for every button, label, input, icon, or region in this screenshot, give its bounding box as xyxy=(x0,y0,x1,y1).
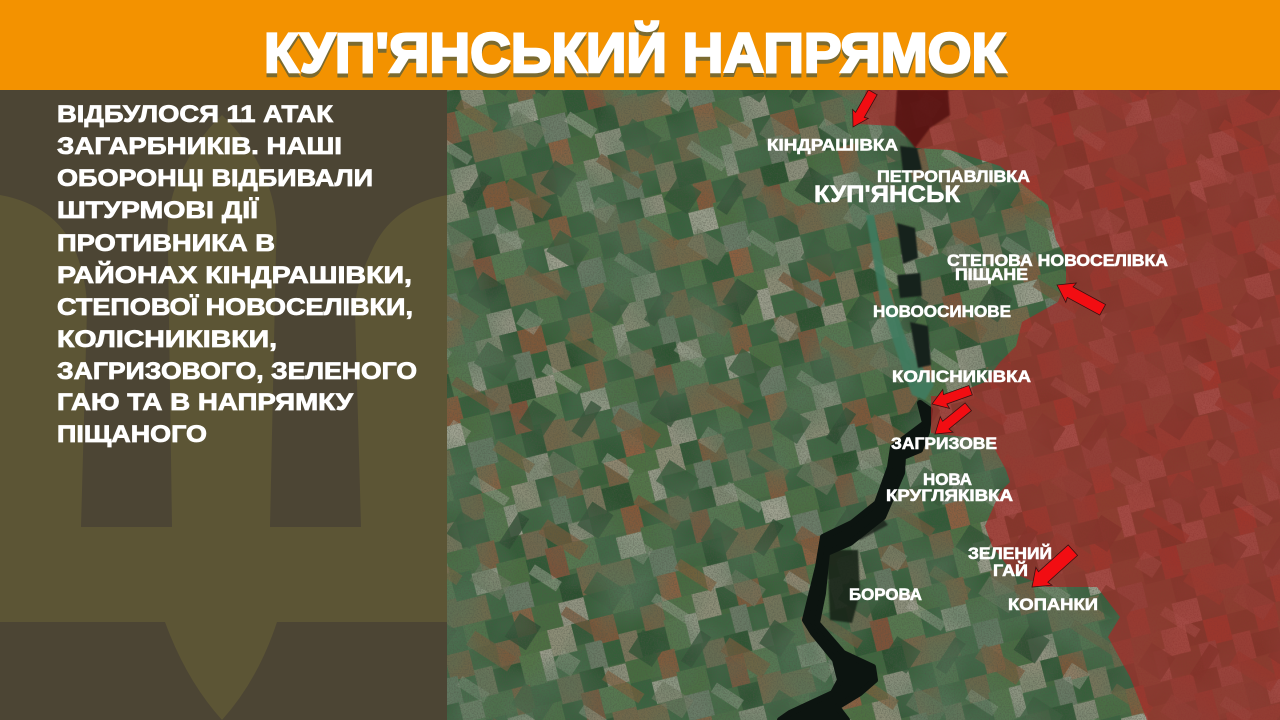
arrow: Kolisnykivka xyxy=(931,385,973,409)
arrow: Kindrashivka xyxy=(852,90,878,128)
body text: ПРОТИВНИКА В xyxy=(57,230,275,257)
label: Nova: НОВА xyxy=(923,471,972,489)
label: Hai: ГАЙ xyxy=(993,561,1028,580)
occupied territory overlay xyxy=(858,90,1280,720)
label: Kolisnykivka: КОЛІСНИКІВКА xyxy=(892,368,1031,386)
label: Zahryzove: ЗАГРИЗОВЕ xyxy=(891,435,997,453)
body text: ВІДБУЛОСЯ 11 АТАК xyxy=(57,101,333,128)
body text: КОЛІСНИКІВКИ, xyxy=(57,326,277,353)
river xyxy=(780,403,930,720)
body text: СТЕПОВОЇ НОВОСЕЛІВКИ, xyxy=(57,294,413,321)
left panel xyxy=(0,90,447,720)
map labels xyxy=(767,136,1168,614)
label: Kruhliakivka: КРУГЛЯКІВКА xyxy=(886,487,1013,505)
dark forest in occupied zone xyxy=(895,90,950,148)
body text: РАЙОНАХ КІНДРАШІВКИ, xyxy=(57,261,412,289)
body text: ОБОРОНЦІ ВІДБИВАЛИ xyxy=(57,165,373,192)
green river valley xyxy=(866,215,934,400)
title: КУП'ЯНСЬКИЙ НАПРЯМОК xyxy=(264,21,1007,84)
arrow: Zahryzove xyxy=(934,402,972,434)
label: Borova: БОРОВА xyxy=(849,586,922,604)
label: Zelenyi: ЗЕЛЕНИЙ xyxy=(968,544,1052,563)
body text: ГАЮ ТА В НАПРЯМКУ xyxy=(57,389,354,416)
body text: ЗАГАРБНИКІВ. НАШІ xyxy=(57,133,342,160)
arrow: Zelenyi Hai xyxy=(1032,544,1078,588)
title bar xyxy=(0,0,1280,90)
label: Stepova Novoselivka: СТЕПОВА НОВОСЕЛІВКА xyxy=(947,252,1168,270)
body text: ПІЩАНОГО xyxy=(57,421,207,448)
body text: ЗАГРИЗОВОГО, ЗЕЛЕНОГО xyxy=(57,358,417,385)
body text: ШТУРМОВІ ДІЇ xyxy=(57,197,260,224)
panel: map xyxy=(447,88,1280,720)
forest patches xyxy=(827,146,931,623)
label: Petropavlivka: ПЕТРОПАВЛІВКА xyxy=(877,168,1030,186)
label: Novoosynove: НОВООСИНОВЕ xyxy=(873,303,1011,321)
label: Kopanky: КОПАНКИ xyxy=(1008,596,1098,614)
body text xyxy=(57,101,417,448)
trident emblem xyxy=(0,115,447,720)
label: Kindrashivka: КІНДРАШІВКА xyxy=(767,136,898,154)
label: Pishchane: ПІЩАНЕ xyxy=(955,266,1028,284)
label: Kupiansk: КУП'ЯНСЬК xyxy=(814,181,960,208)
arrow: Stepova Novoselivka xyxy=(1056,282,1106,316)
title: КУП'ЯНСЬКИЙ НАПРЯМОК xyxy=(264,25,1007,88)
